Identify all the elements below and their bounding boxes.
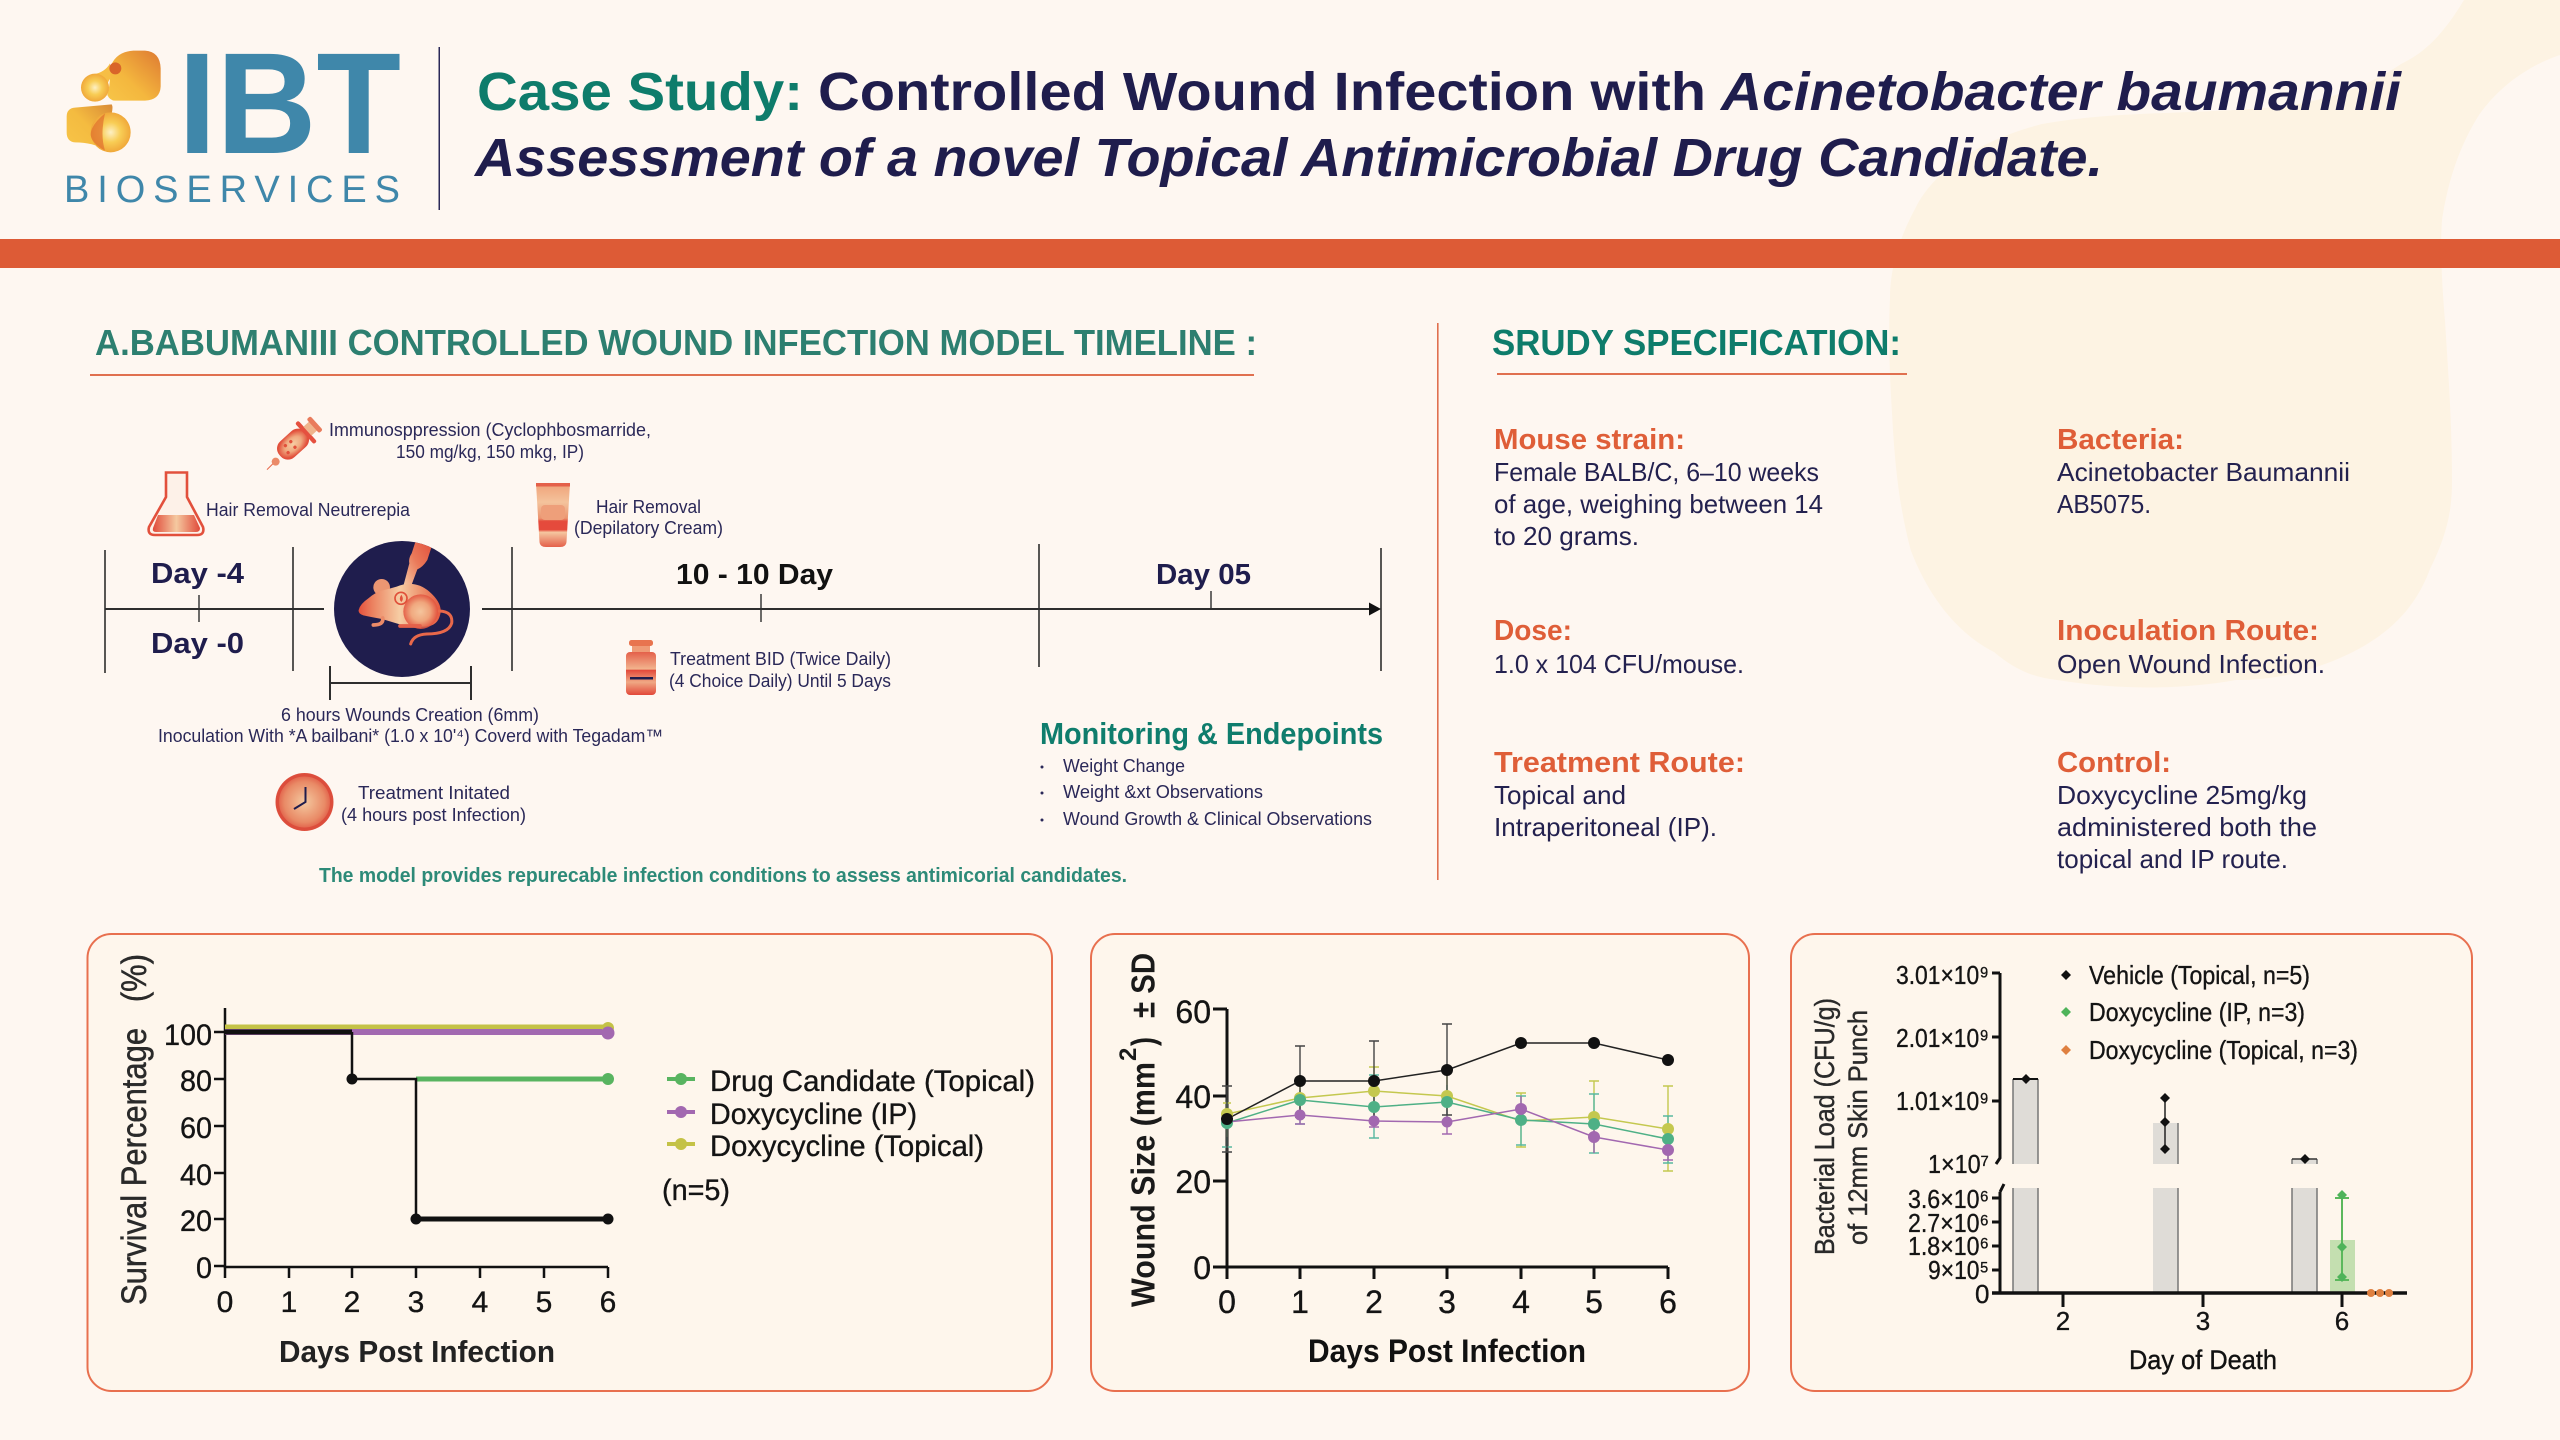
spec: treatment route bbox=[1494, 747, 1745, 842]
bacterial load y-axis title bbox=[1809, 998, 1873, 1255]
text: immunosuppression: Immunosppression (Cyclophbosmarride, bbox=[329, 420, 651, 440]
bacterial load axis labels: 3.6×10⁶ bbox=[1908, 1184, 1989, 1214]
panel: wound size chart: 5 bbox=[1585, 1284, 1603, 1320]
spec: control: Doxycycline 25mg/kg bbox=[2057, 780, 2307, 810]
survival axis labels: 60 bbox=[180, 1112, 212, 1145]
text: treatment initiated bbox=[341, 783, 526, 825]
survival axis labels: 40 bbox=[180, 1159, 212, 1192]
panel: survival chart: 6 bbox=[600, 1286, 616, 1319]
panel: wound size chart bbox=[1091, 934, 1749, 1391]
wound size y-axis title: ) bbox=[1124, 1037, 1162, 1046]
survival legend: Drug Candidate (Topical) bbox=[710, 1065, 1035, 1098]
spec: treatment route: Intraperitoneal (IP). bbox=[1494, 812, 1717, 842]
survival x-axis title: Days Post Infection bbox=[279, 1334, 555, 1369]
survival axis labels: 0 bbox=[196, 1252, 212, 1285]
panel: survival chart: 5 bbox=[536, 1286, 552, 1319]
model summary note: The model provides repurecable infection conditions to assess antimicorial candidates. bbox=[319, 865, 1127, 887]
panel: survival chart: 4 bbox=[472, 1286, 488, 1319]
label: 10 - 10 Day: 10 - 10 Day bbox=[676, 559, 833, 591]
bacterial load axis labels: 2.7×10⁶ bbox=[1908, 1208, 1989, 1238]
bacterial load legend bbox=[2061, 960, 2358, 1065]
spec: inoculation route: Inoculation Route: bbox=[2057, 615, 2319, 647]
monitoring and endpoints bbox=[1040, 716, 1383, 829]
panel: survival chart: 0 bbox=[217, 1286, 233, 1319]
title line 1: Case Study: bbox=[477, 62, 803, 122]
wound size axis labels: 40 bbox=[1175, 1079, 1211, 1115]
spec: bacteria: Bacteria: bbox=[2057, 424, 2184, 456]
title line 1: Controlled Wound Infection with bbox=[818, 62, 1706, 122]
spec: control: administered both the bbox=[2057, 812, 2317, 842]
icon: flask bbox=[149, 472, 203, 535]
logo symbol bbox=[67, 51, 161, 152]
bacterial load axes bbox=[1992, 973, 2407, 1307]
text: wounds creation and inoculation: 6 hours Wounds Creation (6mm) bbox=[281, 705, 539, 725]
label: Day -0: Day -0 bbox=[151, 628, 244, 660]
bacterial load x-axis title: Day of Death bbox=[2129, 1345, 2277, 1375]
spec: bacteria bbox=[2057, 424, 2350, 519]
wound size y-axis title: Wound Size (mm bbox=[1124, 1062, 1162, 1307]
bacterial load y-axis title: of 12mm Skin Punch bbox=[1843, 1010, 1873, 1245]
spec: mouse strain: Mouse strain: bbox=[1494, 424, 1685, 456]
bacterial load axis labels: 1.01×10⁹ bbox=[1896, 1086, 1989, 1116]
panel: wound size chart: 6 bbox=[1659, 1284, 1677, 1320]
spec: mouse strain: of age, weighing between 14 bbox=[1494, 489, 1823, 519]
text: treatment BID: (4 Choice Daily) Until 5 Days bbox=[669, 671, 891, 691]
wound size series bbox=[1221, 1037, 1674, 1156]
wound size axis labels: 0 bbox=[1193, 1250, 1211, 1286]
icon: syringe bbox=[267, 413, 326, 470]
icon: mouse on navy circle bbox=[334, 540, 470, 677]
spec: inoculation route: Open Wound Infection. bbox=[2057, 649, 2325, 679]
bacterial load axis labels: 9×10⁵ bbox=[1928, 1255, 1989, 1285]
text: hair removal depilatory: (Depilatory Cream) bbox=[574, 518, 723, 538]
panel: survival chart: 2 bbox=[344, 1286, 360, 1319]
label: Day -4: Day -4 bbox=[151, 558, 244, 590]
wound size y-axis title bbox=[1115, 953, 1162, 1307]
text: immunosuppression bbox=[329, 420, 651, 462]
panel: timeline bbox=[90, 322, 1383, 887]
title line 2: Assessment of a novel Topical Antimicrobial Drug Candidate. bbox=[473, 128, 2103, 188]
panel: bacterial load chart bbox=[1791, 934, 2472, 1391]
text: treatment initiated: Treatment Initated bbox=[358, 783, 510, 803]
icon: bottle bbox=[626, 640, 656, 695]
specification heading: SRUDY SPECIFICATION: bbox=[1492, 322, 1901, 363]
bacterial load legend: Doxycycline (IP, n=3) bbox=[2089, 997, 2305, 1027]
panel: bacterial load chart: 3 bbox=[2196, 1306, 2210, 1336]
text: wounds creation and inoculation: Inoculation With *A bailbani* (1.0 x 10'⁴) Coverd with Tegadam™ bbox=[158, 726, 663, 746]
survival curves bbox=[225, 1022, 614, 1224]
monitoring and endpoints: Wound Growth & Clinical Observations bbox=[1063, 809, 1372, 829]
survival y-axis title: Survival Percentage (%) bbox=[115, 954, 154, 1305]
monitoring and endpoints: Monitoring & Endepoints bbox=[1040, 716, 1383, 751]
panel: survival chart bbox=[88, 934, 1052, 1391]
bacterial load axis labels bbox=[1896, 960, 1989, 1309]
spec: treatment route: Topical and bbox=[1494, 780, 1626, 810]
text: treatment BID: Treatment BID (Twice Daily) bbox=[670, 649, 891, 669]
spec: dose: 1.0 x 104 CFU/mouse. bbox=[1494, 649, 1744, 679]
bacterial load bars bbox=[2013, 1079, 2355, 1293]
text: hair removal depilatory bbox=[574, 497, 723, 538]
spec: inoculation route bbox=[2057, 615, 2325, 679]
text: hair removal depilatory: Hair Removal bbox=[596, 497, 701, 517]
title line 1 bbox=[477, 62, 2402, 122]
spec: bacteria: AB5075. bbox=[2057, 489, 2151, 519]
orange header bar bbox=[0, 239, 2560, 268]
logo subtitle: BIOSERVICES bbox=[64, 169, 400, 211]
bacterial load axis labels: 3.01×10⁹ bbox=[1896, 960, 1989, 990]
survival axis labels: 100 bbox=[164, 1019, 212, 1052]
wound size x-axis title: Days Post Infection bbox=[1308, 1333, 1586, 1369]
bacterial load data points bbox=[2021, 1074, 2393, 1297]
spec: control bbox=[2057, 747, 2317, 874]
bacterial load axis labels: 1.8×10⁶ bbox=[1908, 1231, 1989, 1261]
survival legend: (n=5) bbox=[662, 1174, 730, 1207]
spec: control: topical and IP route. bbox=[2057, 844, 2288, 874]
icon: clock bbox=[276, 773, 334, 831]
panel: survival chart: 3 bbox=[408, 1286, 424, 1319]
panel: bacterial load chart: 6 bbox=[2335, 1306, 2349, 1336]
spec: control: Control: bbox=[2057, 747, 2171, 779]
panel: wound size chart: 0 bbox=[1218, 1284, 1236, 1320]
panel: survival chart: 1 bbox=[281, 1286, 297, 1319]
monitoring and endpoints: Weight Change bbox=[1063, 756, 1185, 776]
wound size axis labels bbox=[1175, 994, 1211, 1286]
monitoring and endpoints: Weight &xt Observations bbox=[1063, 782, 1263, 802]
bacterial load legend: Vehicle (Topical, n=5) bbox=[2089, 960, 2310, 990]
label: Day 05: Day 05 bbox=[1156, 559, 1251, 591]
wound size axes bbox=[1213, 1009, 1668, 1279]
spec: mouse strain bbox=[1494, 424, 1823, 551]
bacterial load axis labels: 0 bbox=[1975, 1279, 1989, 1309]
survival axis labels: 80 bbox=[180, 1065, 212, 1098]
spec: dose bbox=[1494, 615, 1744, 679]
wound size error bars bbox=[1222, 1024, 1673, 1171]
background blob bbox=[1889, 0, 2560, 688]
survival axis labels: 20 bbox=[180, 1205, 212, 1238]
logo bbox=[64, 23, 401, 211]
survival legend: Doxycycline (IP) bbox=[710, 1098, 917, 1131]
spec: treatment route: Treatment Route: bbox=[1494, 747, 1745, 779]
spec: mouse strain: to 20 grams. bbox=[1494, 521, 1639, 551]
wound size y-axis title: 2 bbox=[1115, 1048, 1142, 1061]
icon: cream tube bbox=[536, 483, 570, 547]
wound size y-axis title: ± SD bbox=[1124, 953, 1162, 1018]
bacterial load y-axis title: Bacterial Load (CFU/g) bbox=[1809, 998, 1840, 1255]
panel: study specification bbox=[1492, 322, 2350, 874]
text: wounds creation and inoculation bbox=[158, 705, 663, 746]
header band bbox=[64, 23, 2402, 211]
panel: wound size chart: 4 bbox=[1512, 1284, 1530, 1320]
spec: bacteria: Acinetobacter Baumannii bbox=[2057, 457, 2350, 487]
panel: wound size chart: 2 bbox=[1365, 1284, 1383, 1320]
bacterial load legend: Doxycycline (Topical, n=3) bbox=[2089, 1035, 2358, 1065]
survival legend bbox=[662, 1065, 1035, 1207]
title line 1: Acinetobacter baumannii bbox=[1719, 62, 2402, 122]
text: treatment BID bbox=[669, 649, 891, 691]
spec: mouse strain: Female BALB/C, 6–10 weeks bbox=[1494, 457, 1819, 487]
wound size axis labels: 20 bbox=[1175, 1164, 1211, 1200]
wound size axis labels: 60 bbox=[1175, 994, 1211, 1030]
survival axis labels bbox=[164, 1019, 212, 1285]
timeline axis bbox=[105, 544, 1381, 700]
text: hair removal neutrerepia: Hair Removal Neutrerepia bbox=[206, 500, 411, 520]
timeline heading: A.BABUMANIII CONTROLLED WOUND INFECTION MODEL TIMELINE : bbox=[95, 322, 1257, 363]
bacterial load axis labels: 2.01×10⁹ bbox=[1896, 1023, 1989, 1053]
survival axes bbox=[214, 1008, 608, 1278]
survival legend: Doxycycline (Topical) bbox=[710, 1130, 984, 1163]
panel: wound size chart: 3 bbox=[1438, 1284, 1456, 1320]
bacterial load axis labels: 1×10⁷ bbox=[1928, 1149, 1989, 1179]
panel: bacterial load chart: 2 bbox=[2056, 1306, 2070, 1336]
text: treatment initiated: (4 hours post Infection) bbox=[341, 805, 526, 825]
logo wordmark IBT: IBT bbox=[178, 23, 401, 184]
panel: wound size chart: 1 bbox=[1291, 1284, 1309, 1320]
text: immunosuppression: 150 mg/kg, 150 mkg, IP) bbox=[396, 442, 584, 462]
spec: dose: Dose: bbox=[1494, 615, 1572, 647]
